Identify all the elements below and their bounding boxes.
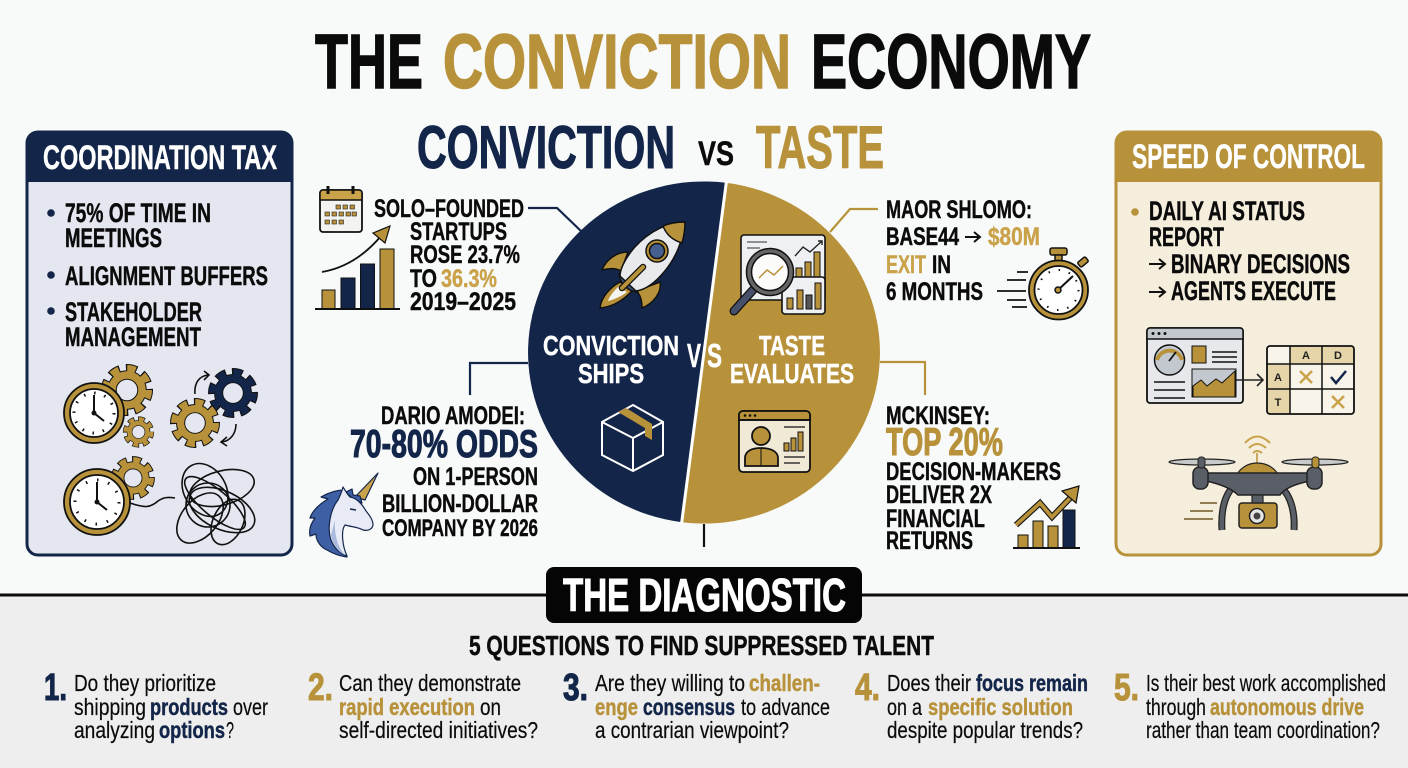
stat text: TOP 20% [886, 421, 1003, 464]
question 1: Do they prioritize [74, 670, 216, 696]
connector [470, 363, 528, 395]
question 5: through [1146, 694, 1206, 720]
question 1: analyzing [74, 717, 155, 743]
pie labels: V [687, 337, 701, 374]
icon: clock with gears [64, 369, 151, 445]
bullet list: 75% OF TIME IN [65, 198, 211, 228]
pie labels: TASTE [759, 330, 825, 361]
stat text: 70-80% ODDS [350, 423, 538, 466]
icon: unicorn [310, 473, 378, 557]
question 4: focus remain [976, 670, 1088, 696]
question 3: challen- [749, 670, 820, 696]
section: diagnostic band [0, 567, 1408, 768]
icon: profile window [739, 411, 810, 472]
heading: conviction vs taste: CONVICTION [417, 114, 675, 181]
question 3: to advance [741, 694, 830, 720]
stat text: $80M [988, 223, 1040, 251]
pie labels [543, 330, 854, 389]
question 4: specific solution [928, 694, 1073, 720]
heading: conviction vs taste: VS [698, 135, 734, 173]
stat text: COMPANY BY 2026 [382, 515, 538, 542]
stat text: MAOR SHLOMO: [886, 196, 1032, 224]
pie half: taste [682, 183, 880, 524]
icon: package box [602, 405, 663, 471]
bullet list: ALIGNMENT BUFFERS [65, 261, 268, 291]
connector [830, 209, 878, 232]
chart: conviction vs taste pie [528, 181, 880, 524]
question 2: Can they demonstrate [339, 670, 521, 696]
stat text: DELIVER 2X [886, 481, 992, 509]
stat text [886, 196, 1040, 306]
question 1 [44, 667, 268, 743]
icon: rocket [600, 222, 685, 308]
question 1: over [233, 694, 268, 720]
heading: conviction vs taste: TASTE [756, 114, 884, 181]
question 4: on a [887, 694, 922, 720]
stat text: EXIT [886, 251, 926, 279]
stat text: IN [932, 251, 951, 279]
icon: rotating gears [175, 371, 253, 446]
icon: stopwatch [997, 248, 1089, 320]
bullet list: MEETINGS [65, 223, 162, 253]
stat text: BASE44 [886, 223, 959, 251]
bullet list: DAILY AI STATUS [1149, 196, 1305, 226]
annotation: dario amodei [310, 363, 538, 557]
title: THE [315, 19, 423, 105]
question 5: 5. [1114, 667, 1139, 709]
stat text: BILLION-DOLLAR [382, 490, 538, 518]
question 2: self-directed initiatives? [339, 717, 538, 743]
question 1: 1. [44, 667, 67, 709]
question 3: a contrarian viewpoint? [595, 717, 789, 743]
icon: decision matrix: A [1302, 350, 1310, 362]
panel: coordination tax [26, 131, 293, 555]
stat text: 36.3% [441, 265, 497, 293]
question 1: ? [226, 717, 234, 743]
icon: calendar [320, 186, 362, 232]
question 2 [308, 667, 538, 743]
question 1: products [150, 694, 228, 720]
pie labels: EVALUATES [730, 358, 854, 389]
bullet list: STAKEHOLDER [65, 297, 202, 327]
stat text: STARTUPS [410, 218, 507, 246]
stat text: TO [410, 265, 437, 293]
stat text: DARIO AMODEI: [381, 402, 525, 430]
stat text: RETURNS [886, 527, 973, 555]
question 2: rapid execution [339, 694, 475, 720]
question 3: enge [595, 694, 638, 720]
question 5 [1114, 667, 1386, 743]
pie labels: S [707, 337, 722, 374]
stat text [350, 402, 538, 542]
icon: decision matrix: A [1274, 372, 1282, 384]
panel heading: COORDINATION TAX [43, 139, 277, 177]
bullet list [47, 198, 268, 352]
question 1: options [159, 717, 225, 743]
question 2: on [480, 694, 501, 720]
stat text: ROSE 23.7% [410, 241, 520, 269]
question 4: Does their [887, 670, 971, 696]
icon: drone [1169, 436, 1348, 530]
stat text: FINANCIAL [886, 505, 985, 533]
annotation: solo-founded startups [315, 186, 582, 316]
stat text: MCKINSEY: [886, 402, 990, 430]
icon: growth chart [1013, 486, 1080, 548]
icon: decision matrix: D [1334, 350, 1342, 362]
title [315, 19, 1091, 105]
question 1: shipping [74, 694, 146, 720]
icon: status dashboard [1147, 328, 1243, 403]
stat text [374, 195, 524, 316]
question 4: 4. [855, 667, 880, 709]
question 3: consensus [643, 694, 735, 720]
connector [880, 362, 925, 395]
pie labels: CONVICTION [543, 330, 679, 361]
icon: clock and tangled scribble [64, 455, 262, 552]
annotation: mckinsey [880, 362, 1080, 555]
question 3 [563, 667, 830, 743]
connector [528, 208, 582, 232]
question 3: Are they willing to [595, 670, 745, 696]
icon: decision matrix [1267, 346, 1354, 414]
stat text: 2019–2025 [410, 288, 516, 316]
icon: rising bar chart [315, 226, 400, 309]
icon: analytics with magnifier [734, 235, 825, 314]
annotation: maor shlomo [830, 196, 1089, 320]
stat text [886, 402, 1061, 555]
badge: the diagnostic: THE DIAGNOSTIC [563, 569, 846, 621]
bullet list: MANAGEMENT [65, 322, 201, 352]
bullet list: REPORT [1149, 222, 1224, 252]
question 3: 3. [563, 667, 588, 709]
panel: speed of control [1115, 131, 1382, 555]
stat text: ON 1-PERSON [413, 463, 538, 491]
subheading: 5 QUESTIONS TO FIND SUPPRESSED TALENT [469, 630, 934, 661]
stat text: SOLO–FOUNDED [374, 195, 524, 223]
question 2: 2. [308, 667, 333, 709]
stat text: DECISION-MAKERS [886, 458, 1061, 486]
question 5: autonomous drive [1210, 694, 1364, 720]
question 4 [855, 667, 1088, 743]
pie labels: SHIPS [578, 358, 644, 389]
icon: decision matrix: T [1275, 397, 1282, 409]
title: CONVICTION [443, 19, 791, 105]
badge: the diagnostic [546, 567, 862, 623]
question 4: despite popular trends? [887, 717, 1083, 743]
pie half: conviction [528, 181, 726, 522]
stat text: 6 MONTHS [886, 278, 983, 306]
arrow: dashboard to matrix [1236, 374, 1263, 386]
title: ECONOMY [811, 19, 1091, 105]
bullet list [1131, 196, 1350, 306]
